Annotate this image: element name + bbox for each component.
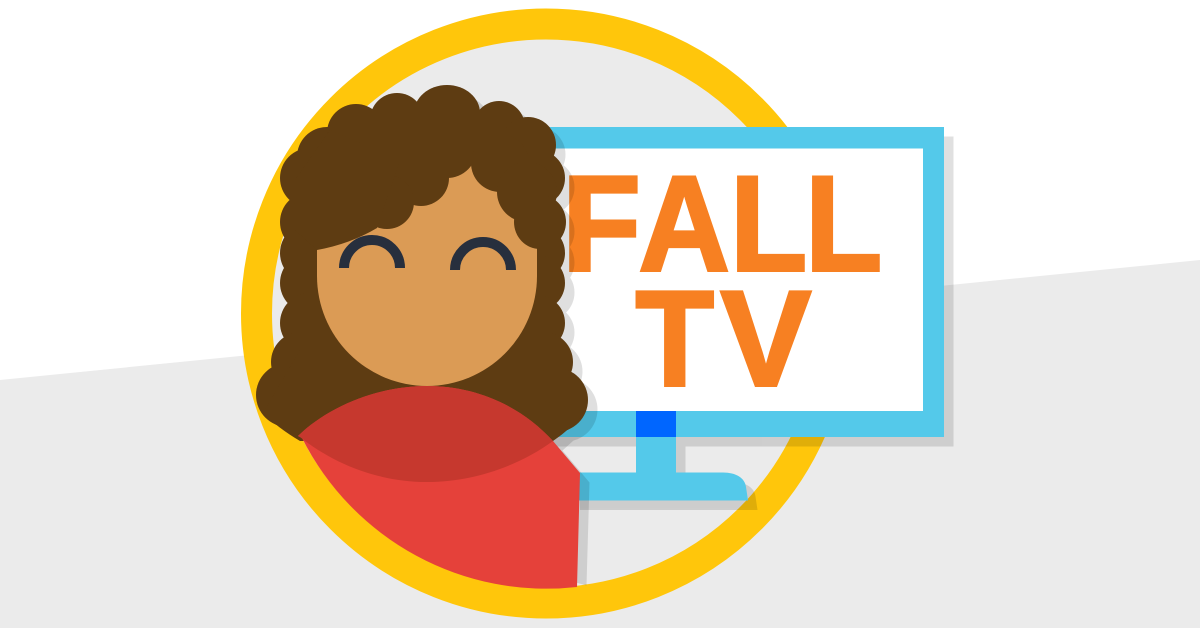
tv screen: [550, 148, 923, 411]
circle badge with yellow ring: [256, 24, 836, 603]
eye: right: [455, 242, 511, 270]
screen title: FALL TV: T: [636, 263, 714, 415]
person: [256, 85, 588, 589]
face: [317, 150, 537, 386]
background slanted band: [0, 260, 1200, 628]
screen title: FALL TV: F: [562, 148, 641, 300]
screen title: FALL TV: [562, 147, 882, 415]
shirt: [298, 386, 580, 589]
tv stand base: [570, 472, 748, 500]
screen title: FALL TV: L: [730, 147, 807, 299]
shirt collar shade: [298, 386, 553, 482]
eye: left: [344, 240, 400, 268]
tv frame: [540, 127, 944, 437]
screen title: FALL TV: L: [805, 147, 882, 299]
screen title: FALL TV: V: [720, 262, 811, 414]
person shadow: [336, 94, 598, 586]
hair top and bangs: [280, 85, 566, 250]
screen title: FALL TV: A: [638, 147, 730, 299]
hair back: [256, 150, 588, 441]
tv power block: [636, 411, 676, 437]
tv stand neck: [636, 437, 676, 473]
television: [540, 127, 944, 500]
tv shadow: [550, 136, 954, 510]
